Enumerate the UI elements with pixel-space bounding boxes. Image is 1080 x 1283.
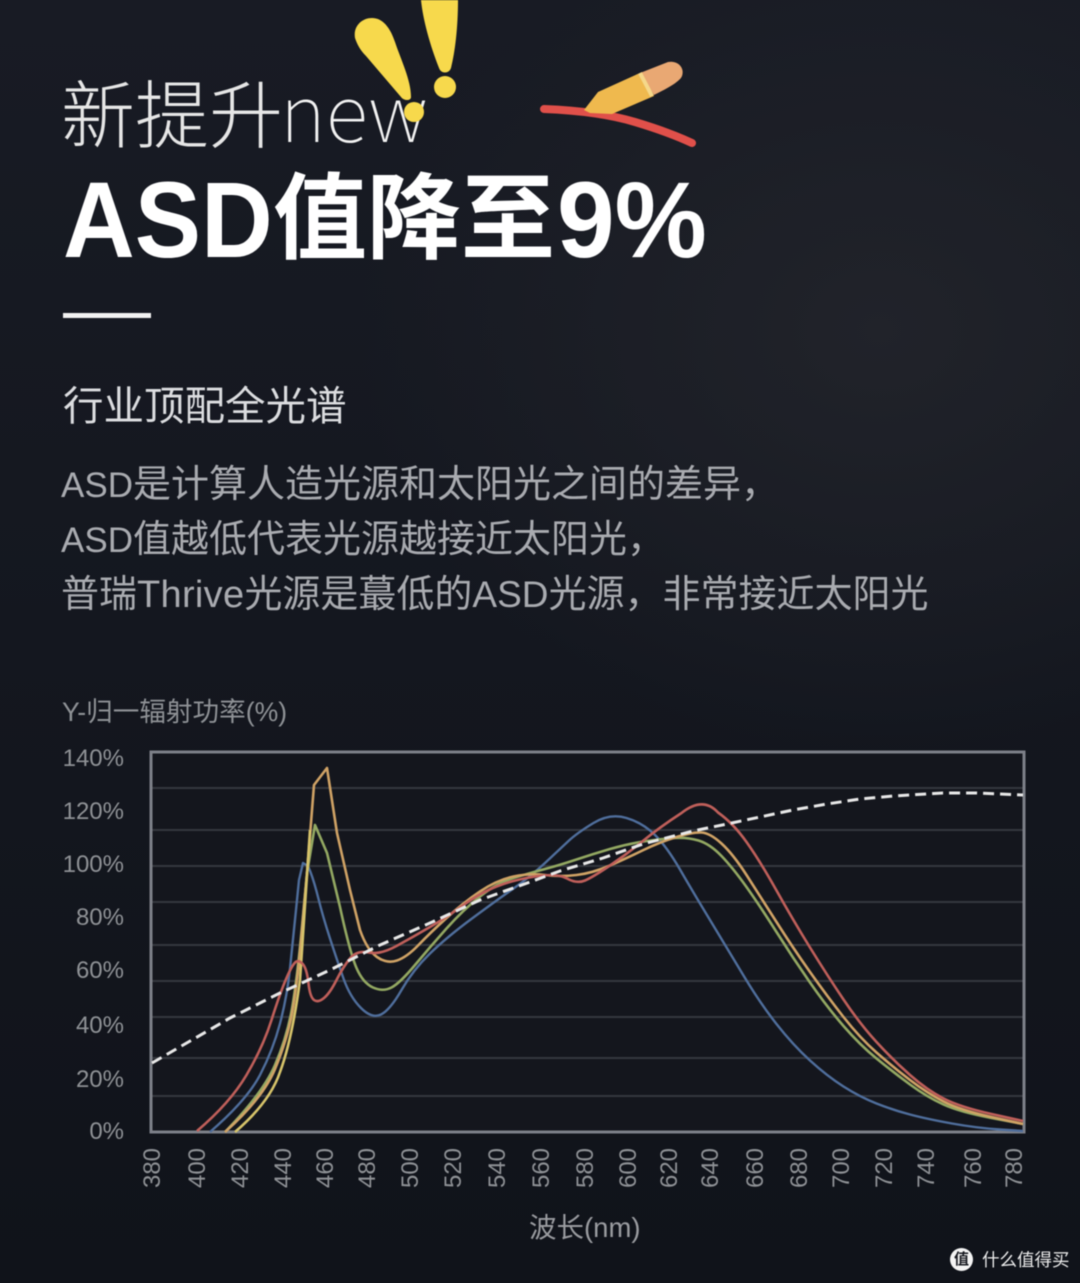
- curve: blue: [210, 816, 1023, 1132]
- y axis tick labels: 120%: [63, 798, 124, 825]
- title: ASD down to 9%: [63, 159, 707, 280]
- x axis tick labels: 420: [227, 1148, 254, 1188]
- y axis tick labels: 140%: [63, 745, 124, 772]
- x axis title: 波长(nm): [529, 1212, 641, 1243]
- x axis tick labels: 540: [484, 1148, 511, 1188]
- x axis tick labels: [139, 1148, 1028, 1188]
- icon: exclamation marks: [354, 0, 459, 123]
- subheading: 行业顶配全光谱: [63, 383, 346, 429]
- y axis tick labels: 80%: [76, 904, 124, 931]
- y axis tick labels: 60%: [76, 957, 124, 984]
- description text: ASD值越低代表光源越接近太阳光，: [61, 519, 665, 561]
- y axis tick labels: 100%: [63, 851, 124, 878]
- x axis tick labels: 660: [742, 1148, 769, 1188]
- x axis tick labels: 520: [440, 1148, 467, 1188]
- x axis tick labels: 720: [871, 1148, 898, 1188]
- curve: green: [225, 825, 1023, 1132]
- description text: [60, 464, 929, 616]
- y axis title: Y-归一辐射功率(%): [62, 697, 287, 727]
- x axis tick labels: 580: [572, 1148, 599, 1188]
- watermark: [949, 1247, 1070, 1272]
- title: ASD down to 9%: ASD: [63, 159, 273, 280]
- y axis tick labels: 20%: [76, 1066, 124, 1093]
- title: new upgrade line: 新提升new: [61, 50, 427, 165]
- x axis tick labels: 680: [786, 1148, 813, 1188]
- x axis tick labels: 700: [828, 1148, 855, 1188]
- watermark: 值: [954, 1251, 969, 1268]
- x axis tick labels: 740: [913, 1148, 940, 1188]
- x axis tick labels: 640: [697, 1148, 724, 1188]
- x axis tick labels: 600: [615, 1148, 642, 1188]
- y axis tick labels: [63, 745, 124, 1145]
- curve: tan: [225, 768, 1023, 1132]
- x axis tick labels: 620: [656, 1148, 683, 1188]
- x axis tick labels: 560: [528, 1148, 555, 1188]
- watermark: 什么值得买: [982, 1250, 1070, 1270]
- y axis tick labels: 0%: [89, 1118, 124, 1145]
- x axis tick labels: 380: [139, 1148, 166, 1188]
- y axis tick labels: 40%: [76, 1012, 124, 1039]
- x axis tick labels: 500: [397, 1148, 424, 1188]
- description text: ASD是计算人造光源和太阳光之间的差异，: [61, 464, 779, 506]
- x axis tick labels: 440: [270, 1148, 297, 1188]
- icon: pencil and red stroke: [539, 61, 697, 148]
- plot frame and grid: [151, 752, 1024, 1132]
- x axis tick labels: 400: [184, 1148, 211, 1188]
- curve: yellow rising edge: [235, 830, 310, 1132]
- title: ASD down to 9%: 值降至: [273, 166, 555, 271]
- x axis tick labels: 460: [312, 1148, 339, 1188]
- x axis tick labels: 480: [354, 1148, 381, 1188]
- x axis tick labels: 780: [1001, 1148, 1028, 1188]
- description text: 普瑞Thrive光源是蕞低的ASD光源，非常接近太阳光: [61, 574, 929, 616]
- title: ASD down to 9%: 9%: [557, 159, 707, 280]
- curve: red: [197, 804, 1023, 1131]
- curve: white dashed reference: [152, 793, 1023, 1063]
- divider: [63, 313, 151, 318]
- x axis tick labels: 760: [960, 1148, 987, 1188]
